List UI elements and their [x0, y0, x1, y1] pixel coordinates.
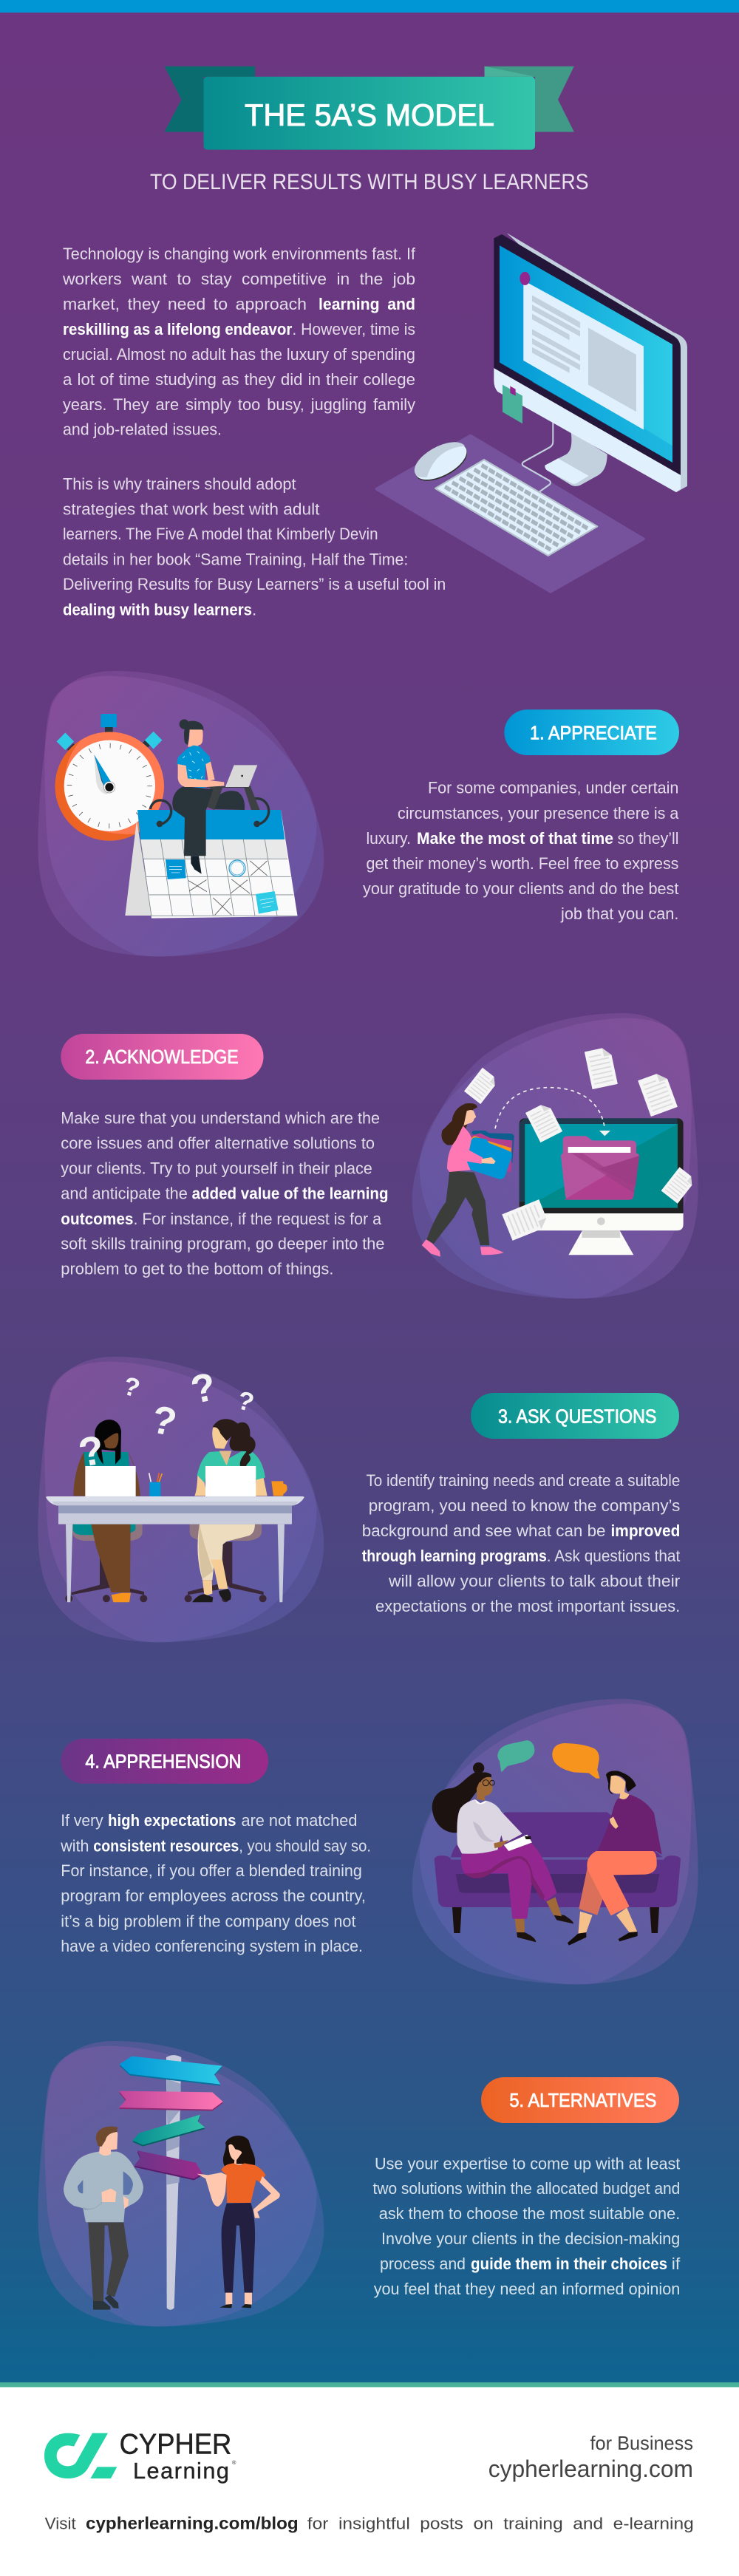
heading pill: 1. APPRECIATE [530, 722, 657, 744]
body text: are not matched [241, 1811, 357, 1830]
body text: For some companies, under certain [428, 779, 678, 797]
intro text: . However, time is [292, 320, 415, 338]
blob backdrop [38, 671, 324, 956]
illustration: two women talking on a sofa [432, 1740, 681, 1946]
body text: For instance, if you offer a blended training [61, 1861, 362, 1880]
body text [61, 1108, 389, 1278]
body text: added value of the learning [192, 1184, 389, 1203]
business label: for Business [590, 2433, 693, 2454]
intro text: years. They are simply too busy, juggling family [63, 395, 416, 414]
top bar [0, 0, 739, 13]
body text: process and [380, 2255, 466, 2273]
intro text: learners. The Five A model that Kimberly Devin [63, 525, 378, 543]
intro text: Delivering Results for Busy Learners” is a useful tool in [63, 575, 446, 593]
heading pill: 4. APPREHENSION [85, 1750, 242, 1772]
illustration: desktop computer [376, 233, 687, 592]
body text: two solutions within the allocated budget and [372, 2179, 680, 2198]
body text: Use your expertise to come up with at least [375, 2155, 681, 2173]
body text: background and see what can be [362, 1522, 606, 1540]
intro text: workers want to stay competitive in the job [62, 270, 415, 288]
footer [44, 2428, 694, 2533]
blog call to action: Visit [45, 2515, 76, 2533]
illustration: woman moving folders to computer [422, 1046, 696, 1257]
illustration: two women at a desk with question marks [46, 1365, 304, 1602]
panel: 5 alternatives [38, 2041, 681, 2326]
logo: cypher learning: CYPHER [120, 2428, 231, 2461]
body text: soft skills training program, go deeper into the [61, 1234, 384, 1253]
intro text: and job-related issues. [63, 420, 222, 439]
logo: cypher learning: ® [232, 2459, 236, 2466]
body text [362, 1471, 681, 1615]
body text: consistent resources [93, 1836, 239, 1855]
body text: and anticipate the [61, 1184, 188, 1203]
intro text: strategies that work best with adult [63, 500, 320, 519]
body text: your clients. Try to put yourself in their place [61, 1159, 372, 1177]
footer rule [0, 2382, 739, 2387]
heading pill: 3. ASK QUESTIONS [498, 1405, 656, 1428]
body text: if [672, 2255, 681, 2273]
body text: problem to get to the bottom of things. [61, 1260, 334, 1278]
intro text: details in her book “Same Training, Half the Time: [63, 550, 408, 568]
body text: If very [61, 1811, 103, 1830]
body text [372, 2155, 681, 2298]
body text: high expectations [108, 1811, 236, 1830]
logo: cypher learning [44, 2428, 236, 2484]
website: cypherlearning.com [488, 2456, 693, 2482]
body text: with [60, 1836, 89, 1855]
logo: cypher learning: Learning [133, 2459, 229, 2484]
intro text: Technology is changing work environments fast. If [63, 245, 416, 263]
body text: guide them in their choices [471, 2255, 667, 2273]
illustration: stopwatch, calendar and woman with laptop [55, 714, 298, 919]
body text: get their money’s worth. Feel free to express [367, 854, 678, 873]
intro text: market, they need to approach [63, 295, 307, 313]
heading pill [61, 1034, 264, 1080]
body text: program, you need to know the company’s [369, 1496, 680, 1515]
intro text: crucial. Almost no adult has the luxury of spending [63, 345, 415, 364]
blob backdrop [412, 1013, 698, 1298]
heading pill [471, 1393, 679, 1439]
body text: it’s a big problem if the company does not [61, 1912, 356, 1930]
heading pill [504, 709, 679, 755]
body text: outcomes [61, 1210, 133, 1228]
intro text: This is why trainers should adopt [63, 474, 296, 493]
body text [363, 779, 679, 923]
body text: Make the most of that time [417, 829, 613, 848]
body text: expectations or the most important issues. [375, 1597, 680, 1615]
illustration: signpost with man and woman [64, 2055, 280, 2310]
body text: your gratitude to your clients and do the best [363, 879, 679, 898]
blob backdrop [38, 1357, 324, 1642]
illustration: two women at a desk with question marks: ? [75, 1426, 107, 1476]
body text: have a video conferencing system in place. [61, 1937, 363, 1955]
heading pill [61, 1739, 268, 1784]
blog call to action [45, 2514, 694, 2533]
panel: 2 acknowledge [61, 1013, 698, 1298]
body text: through learning programs [362, 1547, 547, 1565]
body text: ask them to choose the most suitable one. [379, 2204, 680, 2223]
title banner: THE 5A’S MODEL [245, 98, 494, 132]
body text: luxury. [367, 829, 411, 848]
body text: Make sure that you understand which are the [61, 1108, 380, 1127]
body text [60, 1811, 371, 1955]
blob backdrop [412, 1699, 698, 1984]
intro text: . [252, 600, 256, 619]
body text: . For instance, if the request is for a [133, 1210, 381, 1228]
illustration: two women at a desk with question marks: ? [234, 1386, 257, 1417]
panel: 3 ask questions [38, 1357, 681, 1642]
intro text: a lot of time studying as they did in their college [63, 370, 415, 389]
illustration: two women at a desk with question marks: ? [187, 1365, 219, 1412]
body text: , you should say so. [239, 1836, 371, 1855]
title banner [165, 67, 574, 150]
blog call to action: cypherlearning.com/blog [86, 2514, 299, 2533]
intro text: reskilling as a lifelong endeavor [63, 320, 293, 338]
panel: 4 apprehension [60, 1699, 698, 1984]
body text: improved [610, 1522, 680, 1540]
body text: core issues and offer alternative solutions to [61, 1134, 375, 1153]
body text: Involve your clients in the decision-making [381, 2229, 680, 2248]
heading pill: 5. ALTERNATIVES [509, 2089, 656, 2111]
body text: program for employees across the country, [61, 1887, 366, 1905]
body text: circumstances, your presence there is a [398, 804, 679, 822]
body text: will allow your clients to talk about their [388, 1572, 681, 1590]
intro text: learning and [319, 295, 415, 313]
blob backdrop [38, 2041, 324, 2326]
heading pill: 2. ACKNOWLEDGE [85, 1046, 239, 1068]
intro text [62, 245, 446, 619]
heading pill [481, 2077, 679, 2123]
body text: . Ask questions that [547, 1547, 681, 1565]
panel: 1 appreciate [38, 671, 679, 956]
illustration: two women at a desk with question marks: ? [148, 1397, 180, 1445]
body text: job that you can. [560, 904, 678, 923]
body text: To identify training needs and create a suitable [367, 1471, 680, 1490]
intro text: dealing with busy learners [63, 600, 252, 619]
body text: you feel that they need an informed opinion [374, 2280, 680, 2298]
subtitle: TO DELIVER RESULTS WITH BUSY LEARNERS [150, 170, 588, 194]
blog call to action: for insightful posts on training and e-learning [307, 2515, 694, 2533]
body text: so they’ll [618, 829, 678, 848]
illustration: two women at a desk with question marks: ? [120, 1372, 143, 1403]
